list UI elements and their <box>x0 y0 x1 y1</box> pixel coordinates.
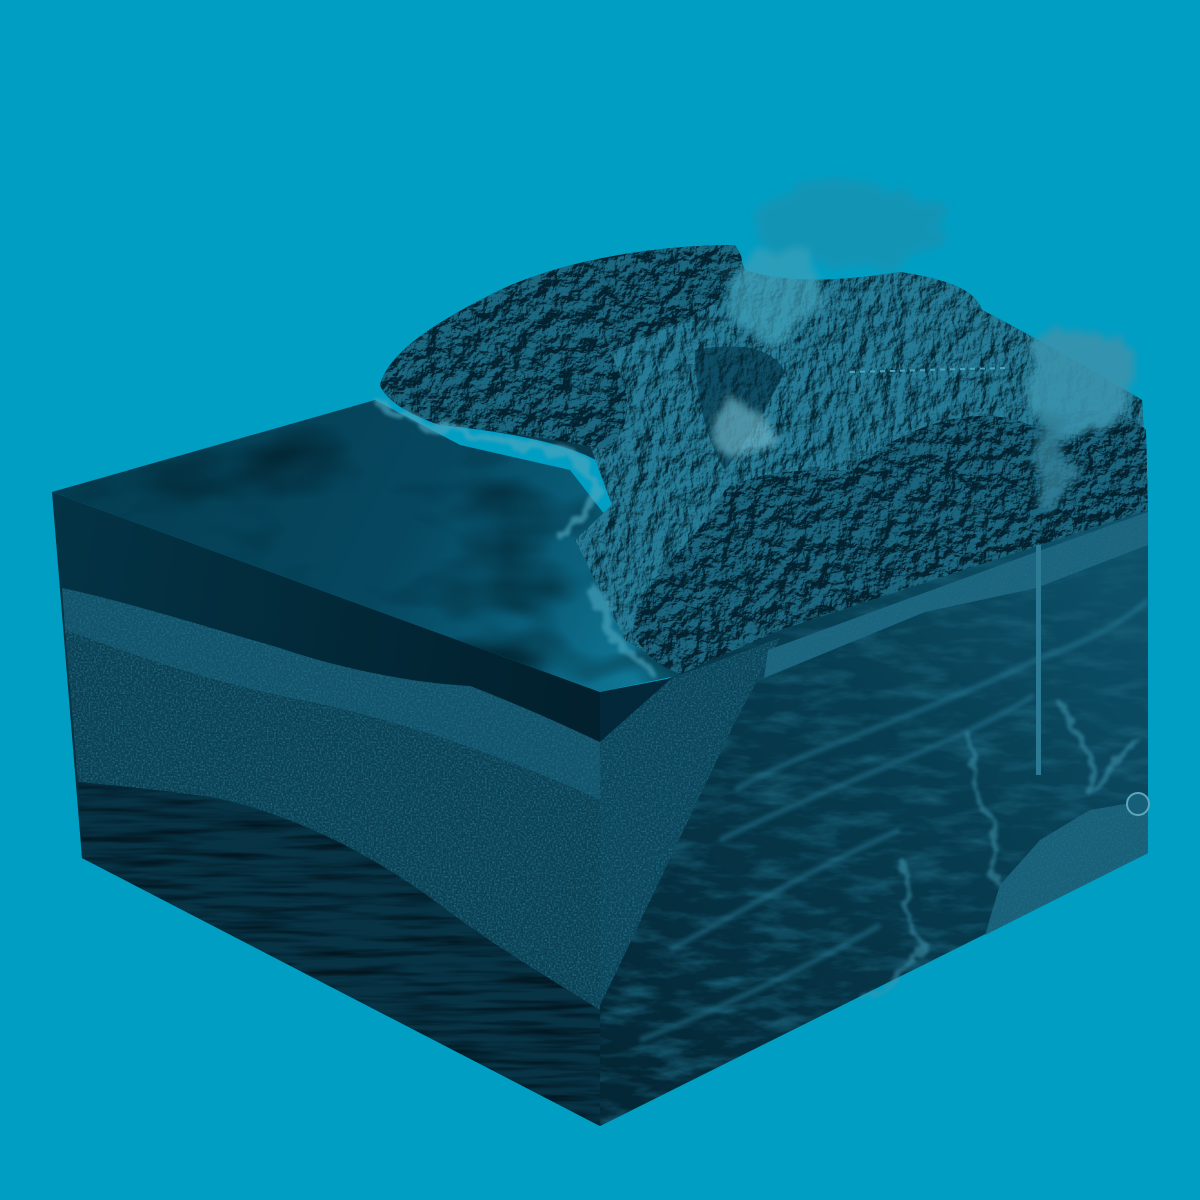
ridge fence <box>850 368 1005 372</box>
back forest hill <box>380 245 742 450</box>
upper rock band <box>764 512 1148 678</box>
strata highlights <box>640 600 1148 1040</box>
rock ring <box>1127 793 1149 815</box>
steam plumes <box>712 183 1136 513</box>
mineral veins <box>860 700 1140 1000</box>
foreground forest <box>634 411 1148 674</box>
block right face <box>600 505 1149 1126</box>
crater shadow <box>695 346 785 470</box>
well shaft <box>1036 545 1041 775</box>
dark strata layer <box>78 782 600 1126</box>
base rocky massif <box>575 270 1148 672</box>
water side corner <box>600 678 672 742</box>
terrain: hillside <box>380 245 1148 674</box>
water surface <box>52 400 680 692</box>
gravel layer <box>65 630 600 1010</box>
block left face <box>52 492 600 1126</box>
gravel wedge <box>600 638 780 1005</box>
dark base silhouette <box>380 245 1148 672</box>
pale rock base at right <box>985 800 1148 935</box>
foam shoreline <box>378 402 652 672</box>
sediment band <box>62 588 600 800</box>
